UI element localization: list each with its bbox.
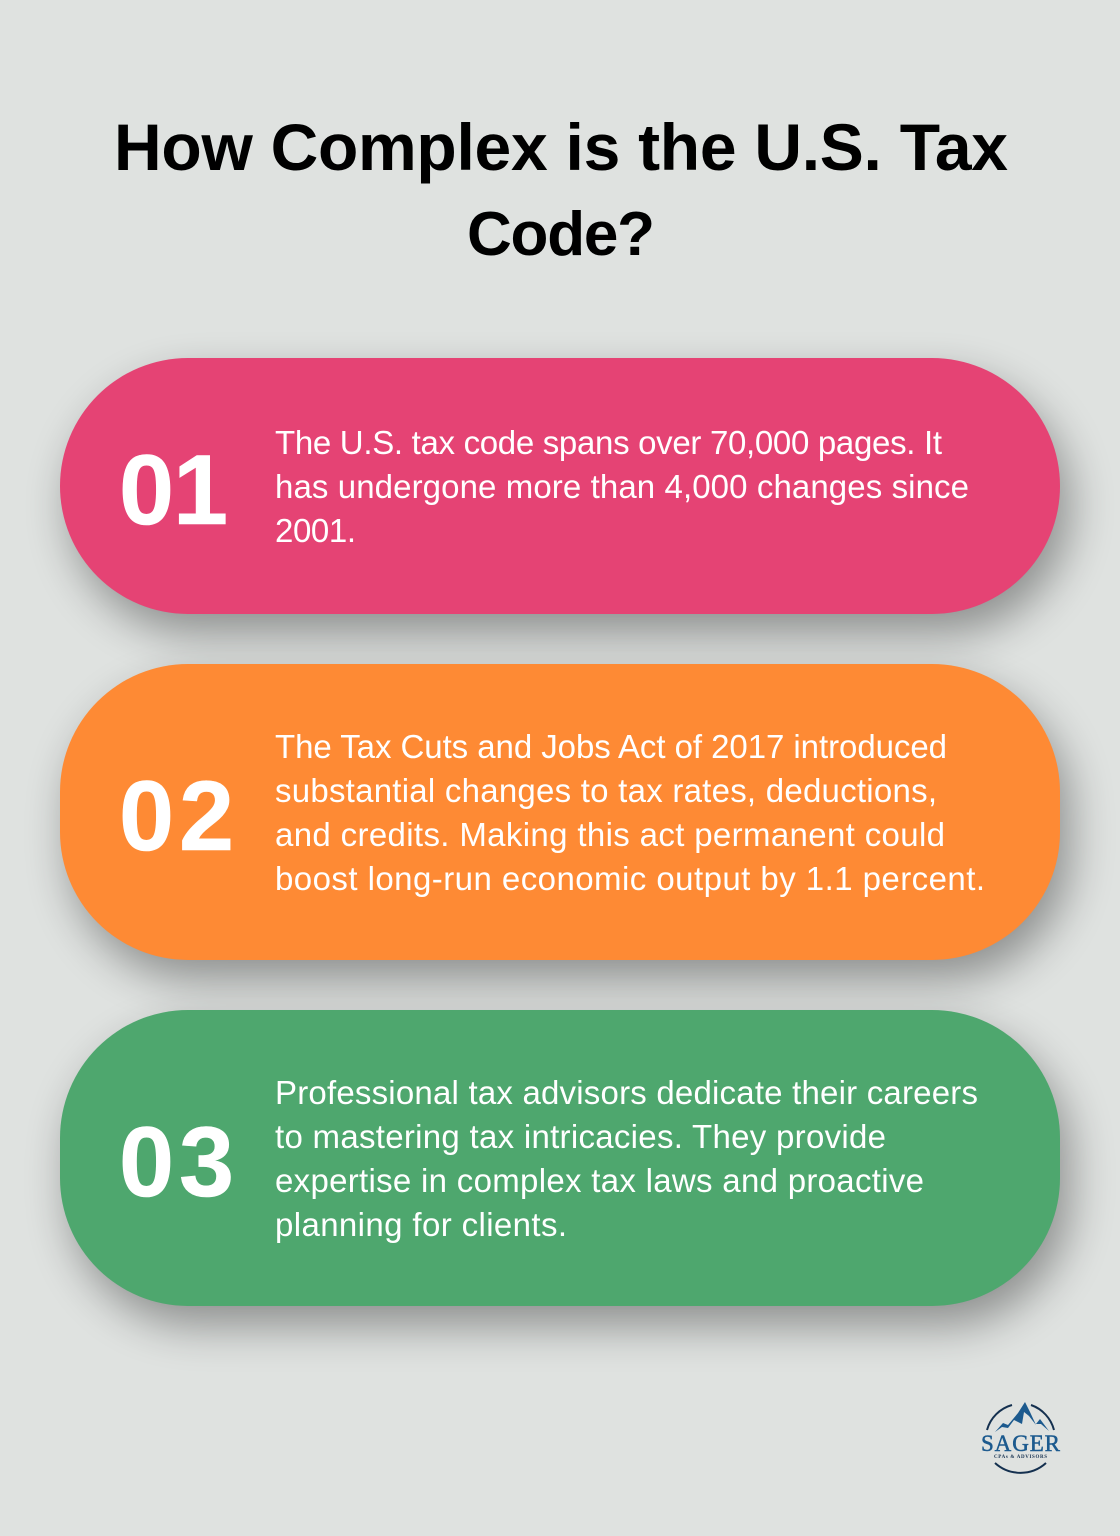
title: How Complex is the U.S. Tax (114, 110, 1008, 184)
text block: card 02: The Tax Cuts and Jobs Act of 2017 introduced (275, 728, 947, 765)
text block: card 03: expertise in complex tax laws and proactive (275, 1162, 924, 1199)
text block: card 03: to mastering tax intricacies. They provide (275, 1118, 886, 1155)
number 03: 03 (119, 1106, 234, 1217)
text block: card 01: has undergone more than 4,000 changes since (275, 468, 969, 505)
number 01: 01 (119, 434, 228, 545)
panel: card 01 (60, 358, 1070, 634)
panel: card 02 (60, 664, 1070, 980)
text block: card 01: 2001. (275, 512, 356, 549)
number 02: 02 (119, 760, 234, 871)
text block: card 02 (275, 728, 985, 897)
title: Code? (467, 200, 655, 269)
icon: Sager logo: CPAs & ADVISORS (994, 1455, 1047, 1460)
title (114, 110, 1008, 269)
text block: card 01 (275, 424, 969, 549)
text block: card 03: planning for clients. (275, 1206, 567, 1243)
icon: Sager logo: SAGER (981, 1431, 1061, 1456)
text block: card 02: boost long-run economic output by 1.1 percent. (275, 860, 985, 897)
text block: card 03: Professional tax advisors dedicate their careers (275, 1074, 978, 1111)
text block: card 03 (275, 1074, 978, 1243)
text block: card 01: The U.S. tax code spans over 70,000 pages. It (275, 424, 942, 461)
text block: card 02: substantial changes to tax rates, deductions, (275, 772, 937, 809)
panel: card 03 (60, 1010, 1070, 1326)
text block: card 02: and credits. Making this act permanent could (275, 816, 945, 853)
icon: Sager logo (981, 1402, 1061, 1473)
